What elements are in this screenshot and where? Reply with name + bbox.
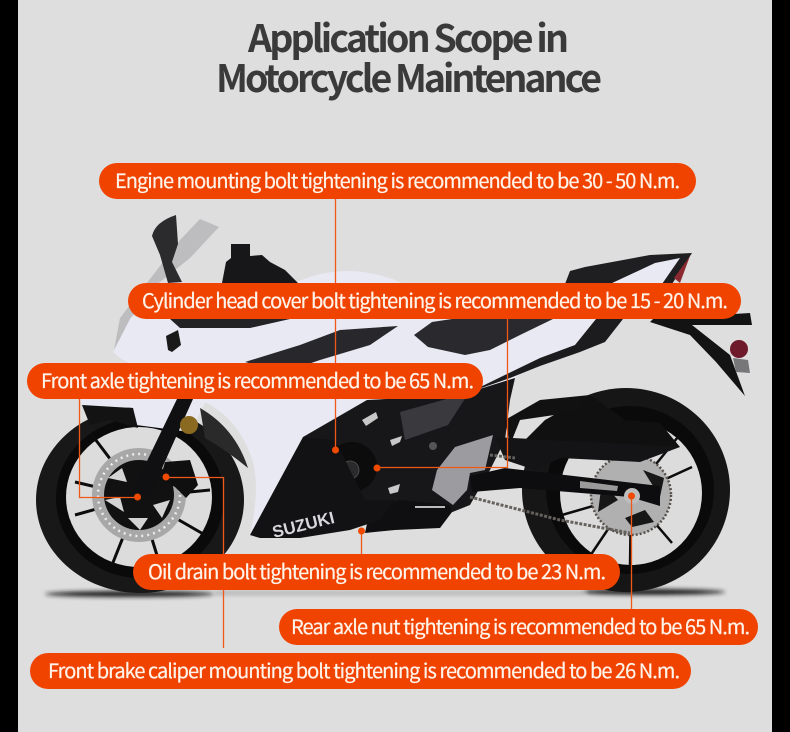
SUZUKI logo: SUZUKI xyxy=(270,508,336,542)
foot control xyxy=(365,500,452,533)
windscreen xyxy=(114,219,219,350)
title xyxy=(216,8,602,103)
turn signal xyxy=(180,416,198,434)
callout: front brake caliper mounting bolt: Front brake caliper mounting bolt tightening is recommended to be 26 N.m. xyxy=(48,655,680,684)
caliper xyxy=(160,460,198,498)
axle nut xyxy=(624,488,640,504)
callout: engine mounting bolt: Engine mounting bolt tightening is recommended to be 30 - 50 N.m. xyxy=(115,165,680,194)
handlebar cluster xyxy=(222,244,298,283)
callout: rear axle nut: Rear axle nut tightening is recommended to be 65 N.m. xyxy=(291,611,750,640)
callout: cylinder head cover bolt: Cylinder head cover bolt tightening is recommended to be 15 - 20 N.m. xyxy=(142,285,728,314)
upper chain guard xyxy=(495,437,680,470)
footpeg bracket xyxy=(432,435,493,505)
motorcycle illustration xyxy=(36,215,752,597)
rear fender and plate hanger xyxy=(650,313,752,396)
seat xyxy=(414,319,553,355)
sprocket xyxy=(591,455,671,535)
rear mudguard xyxy=(520,395,680,450)
engine crank cover xyxy=(327,442,377,492)
callout: oil drain bolt: Oil drain bolt tightening is recommended to be 23 N.m. xyxy=(148,556,606,585)
drive chain xyxy=(470,497,630,533)
tank dark panel xyxy=(170,319,290,328)
leader lines xyxy=(80,199,632,648)
lower cowl xyxy=(250,437,395,538)
front fender xyxy=(82,405,248,468)
front wheel xyxy=(36,407,244,593)
title: Motorcycle Maintenance xyxy=(216,48,602,103)
mirror xyxy=(152,215,182,283)
headlight area xyxy=(166,330,181,352)
tail cowl xyxy=(565,253,692,284)
fairing and bodywork xyxy=(113,271,596,535)
ground shadow xyxy=(45,589,725,597)
swingarm xyxy=(470,468,660,506)
callout: front axle: Front axle tightening is recommended to be 65 N.m. xyxy=(41,365,474,394)
white panel below pill xyxy=(80,399,240,432)
engine and frame xyxy=(303,378,515,525)
brake disc xyxy=(92,448,186,542)
rear subframe strut xyxy=(505,395,590,445)
reflector xyxy=(730,340,748,358)
rear wheel xyxy=(520,388,730,592)
under-seat fairing xyxy=(470,319,623,392)
engine highlights xyxy=(362,412,420,520)
marker dots xyxy=(134,446,635,534)
front fork xyxy=(132,399,193,495)
title: Application Scope in xyxy=(247,8,569,63)
